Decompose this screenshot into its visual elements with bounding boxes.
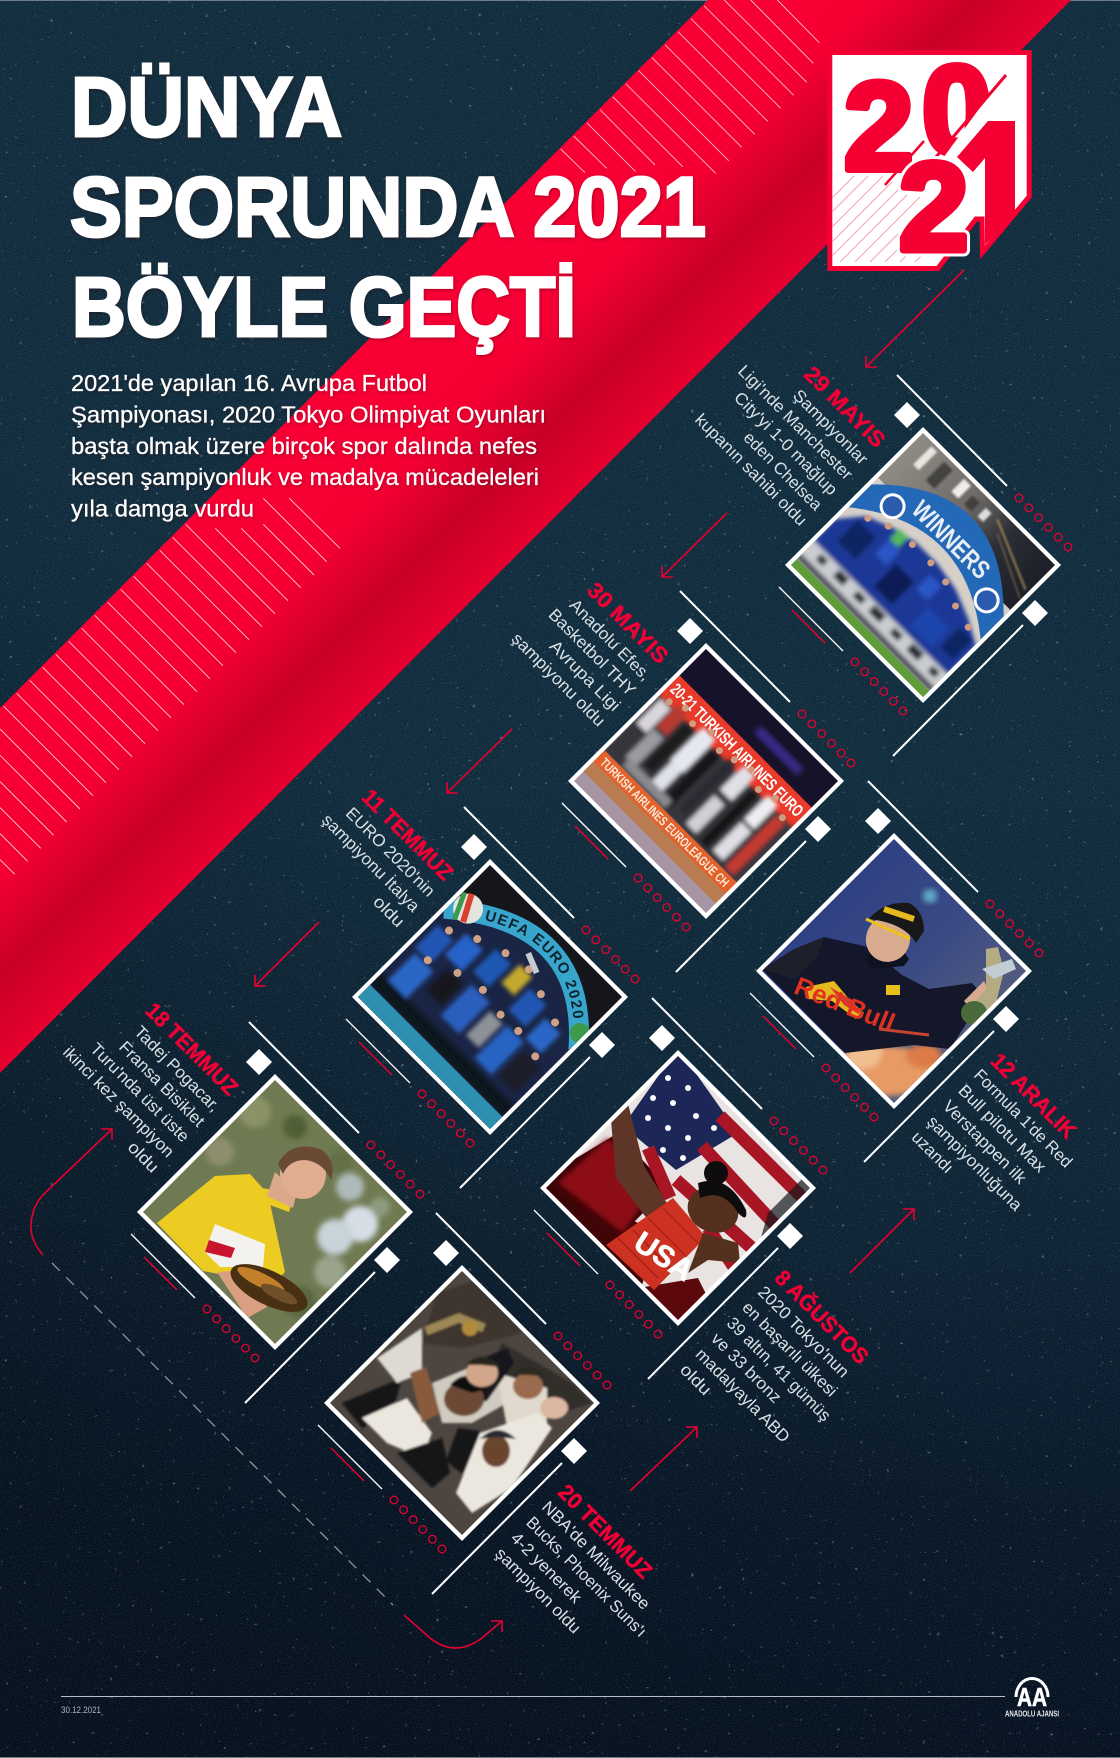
- text: 12 Aralık: Verstappen ilk: [939, 1097, 1030, 1188]
- arrow: 8 Ağustos to 12 Aralık: [850, 1209, 914, 1273]
- title: DÜNYA: [71, 60, 342, 154]
- text: 8 Ağustos: ve 33 bronz: [707, 1329, 785, 1407]
- arrow: 30 Mayıs to 11 Temmuz: [447, 729, 512, 793]
- photo: Anadolu Efes: 20-21 TURKISH AIRLINES EURO: [666, 680, 807, 821]
- text: 30 Mayıs: [508, 564, 674, 730]
- text: 29 Mayıs: Şampiyonlar: [789, 386, 872, 469]
- intro paragraph: kesen şampiyonluk ve madalya mücadeleleri: [71, 464, 539, 490]
- panel: 11 Temmuz: [318, 784, 640, 1189]
- panel: 12 Aralık: [750, 781, 1095, 1234]
- text: 12 Aralık: şampiyonluğuna: [923, 1112, 1026, 1215]
- text: 11 Temmuz: oldu: [369, 892, 408, 931]
- arrow: curved to 20 Temmuz: [404, 1615, 502, 1648]
- text: 30 Mayıs: 30 MAYIS: [582, 577, 673, 669]
- arrow: 20 Temmuz to 8 Ağustos: [630, 1427, 697, 1491]
- text: 20 Temmuz: 20 TEMMUZ: [553, 1479, 657, 1583]
- title: SPORUNDA 2021: [70, 160, 706, 254]
- photo: Chelsea Winners: [788, 430, 1058, 700]
- text: 20 Temmuz: [491, 1479, 685, 1672]
- photo: Anadolu Efes: [572, 647, 840, 915]
- text: 18 Temmuz: Turu'nda üst üste: [86, 1039, 193, 1146]
- text: 20 Temmuz: NBA'de Milwaukee: [538, 1497, 654, 1613]
- arrow: logo to 29 Mayıs: [866, 270, 964, 367]
- text: 30 Mayıs: şampiyonu oldu: [508, 629, 609, 730]
- text: 11 Temmuz: 11 TEMMUZ: [357, 784, 458, 885]
- photo: Chelsea Winners: WINNERS: [906, 494, 997, 585]
- Anadolu Ajansı logo: ANADOLU AJANSI: [1005, 1708, 1059, 1718]
- text: 30 Mayıs: Avrupa Ligi: [546, 637, 624, 715]
- panel: 18 Temmuz: [62, 1004, 424, 1404]
- arrow: 11 Temmuz to 18 Temmuz: [255, 922, 319, 986]
- Anadolu Ajansı logo: [1005, 1678, 1059, 1718]
- photo: Anadolu Efes: TURKISH AIRLINES EUROLEAGUE CH: [597, 755, 732, 890]
- text: 12 Aralık: 12 ARALIK: [986, 1048, 1081, 1144]
- text: 20 Temmuz: şampiyon oldu: [491, 1544, 585, 1637]
- logo: 2021 badge: 0: [922, 42, 992, 180]
- logo: 2021 badge: 2: [844, 58, 914, 196]
- date: 30.12.2021: [61, 1705, 101, 1716]
- hatch lines: lower group: [0, 498, 340, 874]
- panel: 30 Mayıs: [508, 564, 855, 972]
- text: 18 Temmuz: Fransa Bisiklet: [115, 1037, 209, 1131]
- Anadolu Ajansı logo: AA: [1017, 1682, 1047, 1712]
- text: 18 Temmuz: 18 TEMMUZ: [141, 998, 243, 1100]
- text: 12 Aralık: [908, 1047, 1095, 1234]
- panel: 8 Ağustos: [534, 997, 868, 1441]
- text: 11 Temmuz: şampiyonu İtalya: [318, 810, 424, 916]
- photo: USA wrestler with flag: USA: [628, 1226, 699, 1288]
- text: 11 Temmuz: [303, 776, 459, 931]
- intro paragraph: yıla damga vurdu: [71, 496, 254, 522]
- text: 12 Aralık: Formula 1'de Red: [970, 1065, 1076, 1171]
- text: 8 Ağustos: 8 AĞUSTOS: [770, 1265, 874, 1369]
- text: 12 Aralık: Bull pilotu Max: [954, 1081, 1050, 1177]
- text: 30 Mayıs: Anadolu Efes,: [566, 595, 655, 684]
- dashed connector: [52, 1263, 393, 1605]
- photo: Milwaukee Bucks: [327, 1268, 597, 1538]
- text: 29 Mayıs: City'yi 1-0 mağlup: [730, 388, 841, 499]
- text: 18 Temmuz: [44, 977, 243, 1177]
- title: BÖYLE GEÇTİ: [72, 260, 576, 354]
- text: 20 Temmuz: 4-2 yenerek: [507, 1529, 586, 1607]
- text: 8 Ağustos: [676, 1264, 884, 1472]
- text: 18 Temmuz: Tadej Pogacar,: [130, 1022, 224, 1115]
- text: 8 Ağustos: 2020 Tokyo'nun: [754, 1282, 853, 1381]
- logo: 2021 badge: 1: [962, 100, 1032, 239]
- logo: 2021 badge: [830, 42, 1032, 277]
- text: 20 Temmuz: Bucks, Phoenix Suns'ı: [522, 1513, 650, 1641]
- title: [70, 60, 706, 354]
- logo: 2021 badge: 2: [899, 138, 969, 277]
- intro paragraph: 2021'de yapılan 16. Avrupa Futbol: [71, 370, 427, 396]
- text: 29 Mayıs: 29 MAYIS: [799, 361, 890, 453]
- arrow: 29 Mayıs to 30 Mayıs: [662, 513, 727, 577]
- photo: Max Verstappen: [759, 836, 1029, 1106]
- photo: Italy EURO 2020: [358, 865, 622, 1129]
- panel: 29 Mayıs: [688, 327, 1072, 756]
- red diagonal band: [0, 0, 1071, 1073]
- text: 8 Ağustos: oldu: [676, 1360, 715, 1399]
- text: 11 Temmuz: EURO 2020'nin: [342, 804, 439, 900]
- text: 29 Mayıs: kupanın sahibi oldu: [691, 410, 811, 530]
- panel: 20 Temmuz: [318, 1212, 654, 1637]
- text: 30 Mayıs: Basketbol THY: [545, 605, 639, 700]
- photo: Italy EURO 2020: UEFA EURO 2020: [486, 910, 584, 1018]
- text: 18 Temmuz: oldu: [124, 1138, 163, 1177]
- text: 8 Ağustos: en başarılı ülkesi: [738, 1298, 841, 1400]
- arrow: curved up to 18 Temmuz: [31, 1129, 112, 1255]
- intro paragraph: [71, 370, 546, 522]
- intro paragraph: başta olmak üzere birçok spor dalında nefes: [71, 433, 537, 459]
- footer rule: [61, 1696, 1005, 1697]
- text: 29 Mayıs: Ligi'nde Manchester: [734, 361, 857, 484]
- hatch lines: upper group: [561, 0, 819, 173]
- photo: Max Verstappen: Red Bull: [790, 971, 899, 1038]
- text: 18 Temmuz: ikinci kez şampiyon: [59, 1043, 178, 1161]
- text: 29 Mayıs: [688, 327, 892, 530]
- text: 8 Ağustos: 39 altın, 41 gümüş: [723, 1314, 835, 1425]
- text: 29 Mayıs: eden Chelsea: [740, 428, 826, 515]
- intro paragraph: Şampiyonası, 2020 Tokyo Olimpiyat Oyunları: [71, 402, 546, 428]
- text: 12 Aralık: uzandı: [908, 1128, 957, 1177]
- text: 8 Ağustos: madalyayla ABD: [692, 1345, 794, 1446]
- photo: Tadej Pogacar: [140, 1077, 410, 1347]
- photo: USA wrestler with flag: [543, 1048, 813, 1323]
- logo: 2021 badge: 2: [899, 138, 969, 277]
